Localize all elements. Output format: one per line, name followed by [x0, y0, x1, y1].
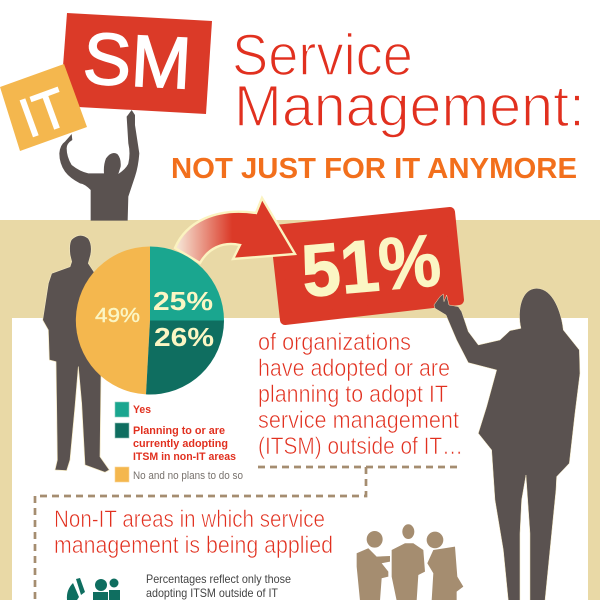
icon: teal people — [67, 578, 120, 600]
heading: non-IT areas — [54, 506, 333, 559]
background tan band — [0, 220, 600, 600]
label: 49 percent: 49% — [95, 305, 140, 327]
pie chart — [76, 246, 224, 395]
slice: 26 percent planning — [146, 320, 224, 395]
text block: 51 percent description: planning to adopt IT — [258, 381, 448, 408]
sign: SM — [60, 13, 212, 114]
text block: 51 percent description: service management — [258, 407, 459, 434]
sign: IT — [0, 64, 87, 151]
figure: woman pointing at sign — [434, 288, 580, 600]
slice: 25 percent yes — [150, 246, 224, 320]
dashed connector — [35, 467, 462, 600]
sign: IT: IT — [12, 76, 75, 149]
legend: Yes — [133, 404, 151, 416]
text block: 51 percent description: have adopted or are — [258, 355, 450, 382]
title: Management: — [234, 74, 585, 139]
text block: 51 percent description: (ITSM) outside of IT… — [258, 433, 463, 460]
text block: 51 percent description — [258, 329, 463, 460]
legend: Planning to or are — [133, 425, 225, 437]
figure: man behind pie chart — [43, 235, 109, 472]
slice: 49 percent no plans — [76, 246, 150, 394]
legend: currently adopting — [133, 438, 228, 450]
legend: No and no plans to do so — [133, 470, 243, 482]
title: Service — [232, 23, 413, 88]
figures: group of three people — [357, 524, 463, 600]
note: percentages: adopting ITSM outside of IT — [146, 586, 279, 600]
heading: non-IT areas: Non-IT areas in which service — [54, 506, 325, 533]
legend: ITSM in non-IT areas — [133, 451, 236, 463]
callout: 51 percent sign: 51% — [298, 218, 444, 313]
label: 26 percent: 26% — [154, 322, 214, 352]
arrow to 51 percent — [175, 198, 295, 263]
white content panel — [12, 318, 588, 600]
title — [232, 23, 585, 139]
text block: 51 percent description: of organizations — [258, 329, 411, 356]
legend — [115, 402, 243, 482]
label: 25 percent: 25% — [153, 286, 213, 316]
note: percentages: Percentages reflect only those — [146, 572, 291, 586]
subtitle: NOT JUST FOR IT ANYMORE — [171, 153, 577, 185]
sign: SM: SM — [81, 18, 193, 105]
heading: non-IT areas: management is being applied — [54, 532, 333, 559]
note: percentages — [146, 572, 291, 600]
figure: man holding signs — [59, 110, 139, 221]
